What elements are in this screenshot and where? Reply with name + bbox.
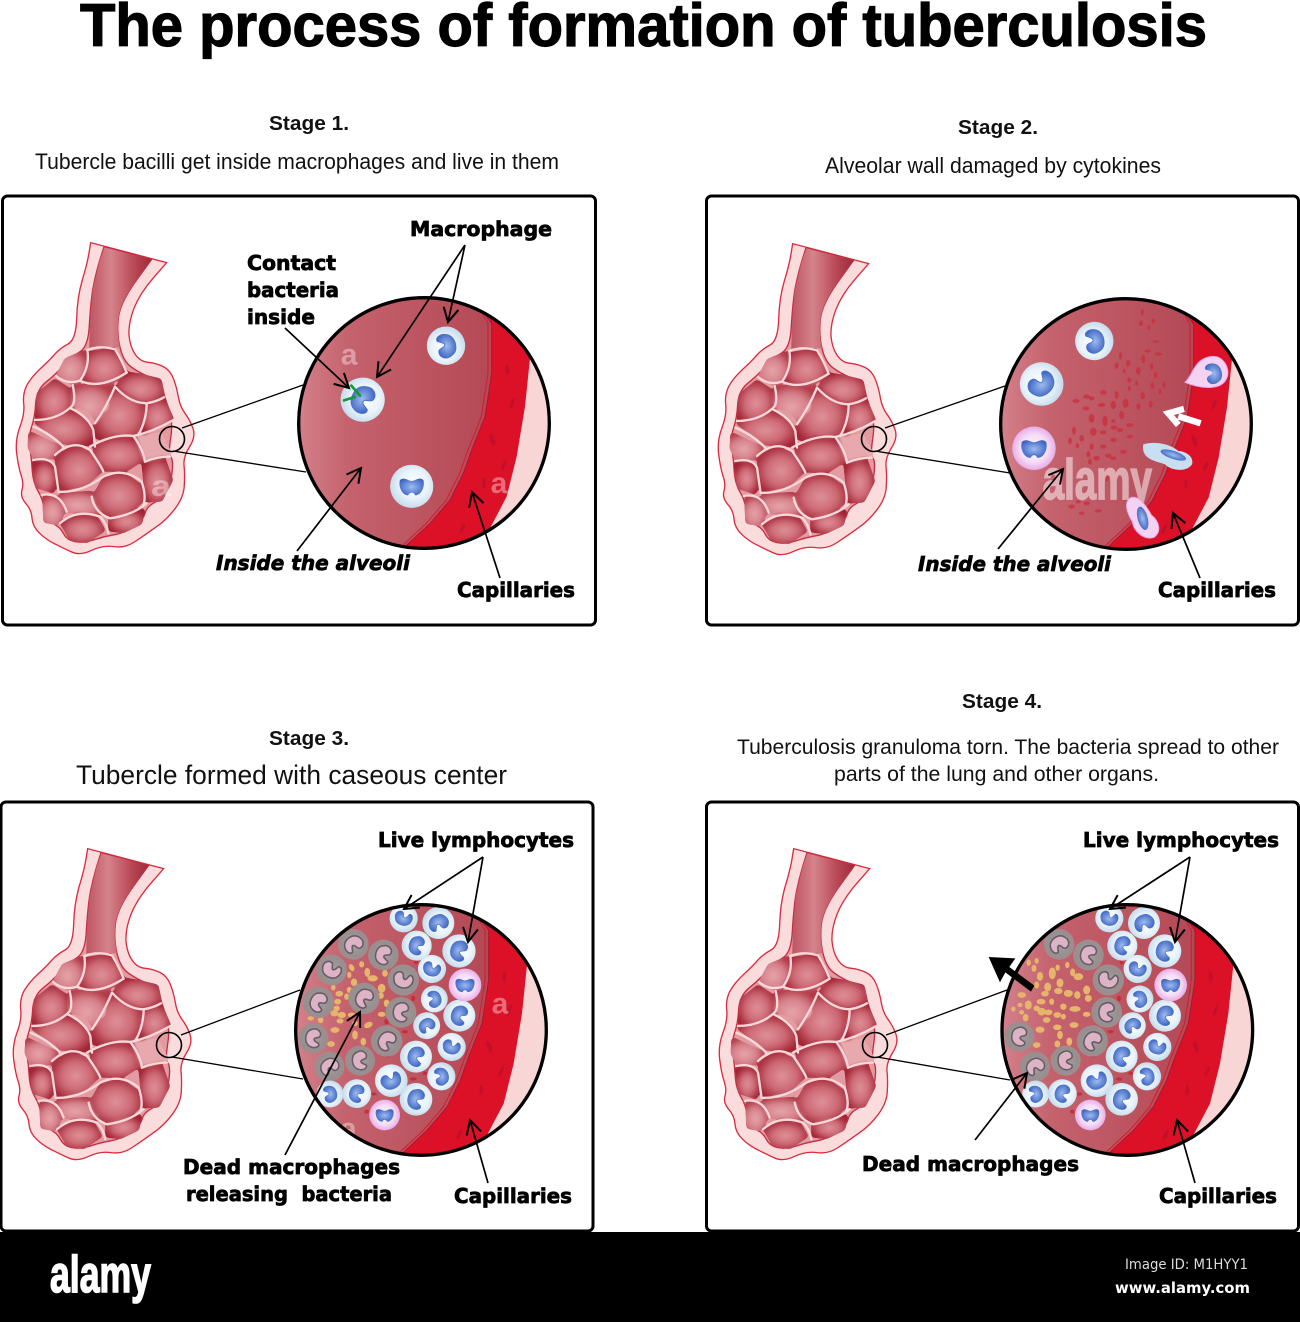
- labels: inside: [247, 305, 315, 329]
- magnified view: [1001, 299, 1259, 557]
- image id: Image ID: M1HYY1: [1125, 1257, 1248, 1273]
- watermark letters: [340, 987, 509, 1145]
- stage 3 frame: [1, 802, 593, 1231]
- zoom lines and marker circle: [156, 990, 303, 1079]
- arrows: [975, 857, 1195, 1183]
- spreading bacteria flecks: [1012, 959, 1091, 1047]
- arrows: [285, 245, 500, 578]
- labels: Capillaries: [1158, 578, 1276, 602]
- labels: [216, 217, 575, 602]
- macrophage top: [424, 323, 468, 368]
- macrophage bottom cell: [390, 465, 433, 508]
- watermark letters: a: [492, 987, 509, 1020]
- live lymphocytes: [1020, 900, 1187, 1130]
- stage 1 heading: Stage 1.: [269, 113, 349, 135]
- labels: [862, 828, 1279, 1208]
- black spread arrow: [989, 957, 1034, 992]
- magnified view: [296, 900, 554, 1163]
- stage 4 frame: [706, 802, 1298, 1231]
- migrating cells: [1126, 356, 1228, 538]
- labels: Inside the alveoli: [918, 552, 1112, 576]
- caseous center flecks: [308, 962, 389, 1046]
- panel: stage 1: [2, 113, 596, 625]
- panel: stage 2: [706, 117, 1298, 625]
- watermark letters: a: [340, 1112, 357, 1145]
- watermark letters: [341, 339, 508, 500]
- zoom lines and marker circle: [862, 990, 1010, 1080]
- red flecks: [1070, 959, 1133, 1114]
- dead macrophages: [1002, 923, 1128, 1087]
- labels: bacteria: [247, 278, 339, 302]
- watermark letters: a: [341, 339, 358, 372]
- watermark letters: a: [491, 467, 508, 500]
- watermark: alamy: [1043, 449, 1152, 512]
- circle outline: [296, 905, 546, 1155]
- white arrow: [1168, 409, 1201, 425]
- stage 2 frame: [706, 196, 1298, 625]
- circle outline: [1002, 905, 1253, 1155]
- watermark letter: a: [151, 470, 171, 503]
- macrophage with bacteria: [333, 370, 393, 430]
- labels: [918, 552, 1276, 602]
- live lymphocytes: [314, 900, 481, 1130]
- footer logo: alamy: [50, 1246, 151, 1304]
- red flecks: [364, 959, 427, 1114]
- circle outline: [299, 298, 549, 548]
- alveolus illustration: [16, 243, 194, 554]
- arrows: [285, 857, 488, 1183]
- footer bar: [0, 1232, 1300, 1322]
- labels: [183, 828, 574, 1208]
- circle outline: [1001, 299, 1251, 549]
- arrows: [998, 469, 1200, 578]
- stage 1 frame: [2, 196, 596, 625]
- stage 3 description: Tubercle formed with caseous center: [76, 760, 507, 790]
- labels: Capillaries: [454, 1184, 572, 1208]
- stage 4 description: Tuberculosis granuloma torn. The bacteria spread to other: [737, 736, 1279, 759]
- labels: Dead macrophages: [862, 1152, 1079, 1176]
- stage 2 description: Alveolar wall damaged by cytokines: [825, 153, 1161, 178]
- labels: Contact: [247, 251, 336, 275]
- stage 1 description: Tubercle bacilli get inside macrophages and live in them: [35, 149, 559, 174]
- dead macrophages: [296, 923, 423, 1087]
- zoom lines and marker circle: [160, 385, 306, 472]
- stage 4 description: parts of the lung and other organs.: [834, 763, 1159, 786]
- labels: Capillaries: [457, 578, 575, 602]
- stage 4 heading: Stage 4.: [962, 691, 1042, 713]
- labels: Macrophage: [410, 217, 552, 241]
- stage 2 heading: Stage 2.: [958, 117, 1038, 139]
- stage 4 description: [737, 736, 1279, 786]
- cytokine flecks: [1068, 309, 1166, 515]
- magnified view: [989, 900, 1261, 1163]
- stage 3 heading: Stage 3.: [269, 728, 349, 750]
- labels: Inside the alveoli: [216, 551, 411, 575]
- alveolus illustration: [718, 244, 896, 555]
- alveolus illustration: [719, 849, 897, 1160]
- macrophages: [1011, 320, 1115, 470]
- zoom lines and marker circle: [862, 386, 1010, 473]
- labels: Dead macrophages: [183, 1155, 400, 1179]
- magnified view: [299, 298, 557, 556]
- labels: Capillaries: [1159, 1184, 1277, 1208]
- labels: Live lymphocytes: [1083, 828, 1279, 852]
- panel: stage 4: [706, 691, 1298, 1231]
- alveolus illustration: [13, 849, 191, 1160]
- panel: stage 3: [1, 728, 593, 1231]
- site url: www.alamy.com: [1115, 1279, 1250, 1297]
- labels: Live lymphocytes: [378, 828, 574, 852]
- labels: releasing bacteria: [186, 1182, 392, 1206]
